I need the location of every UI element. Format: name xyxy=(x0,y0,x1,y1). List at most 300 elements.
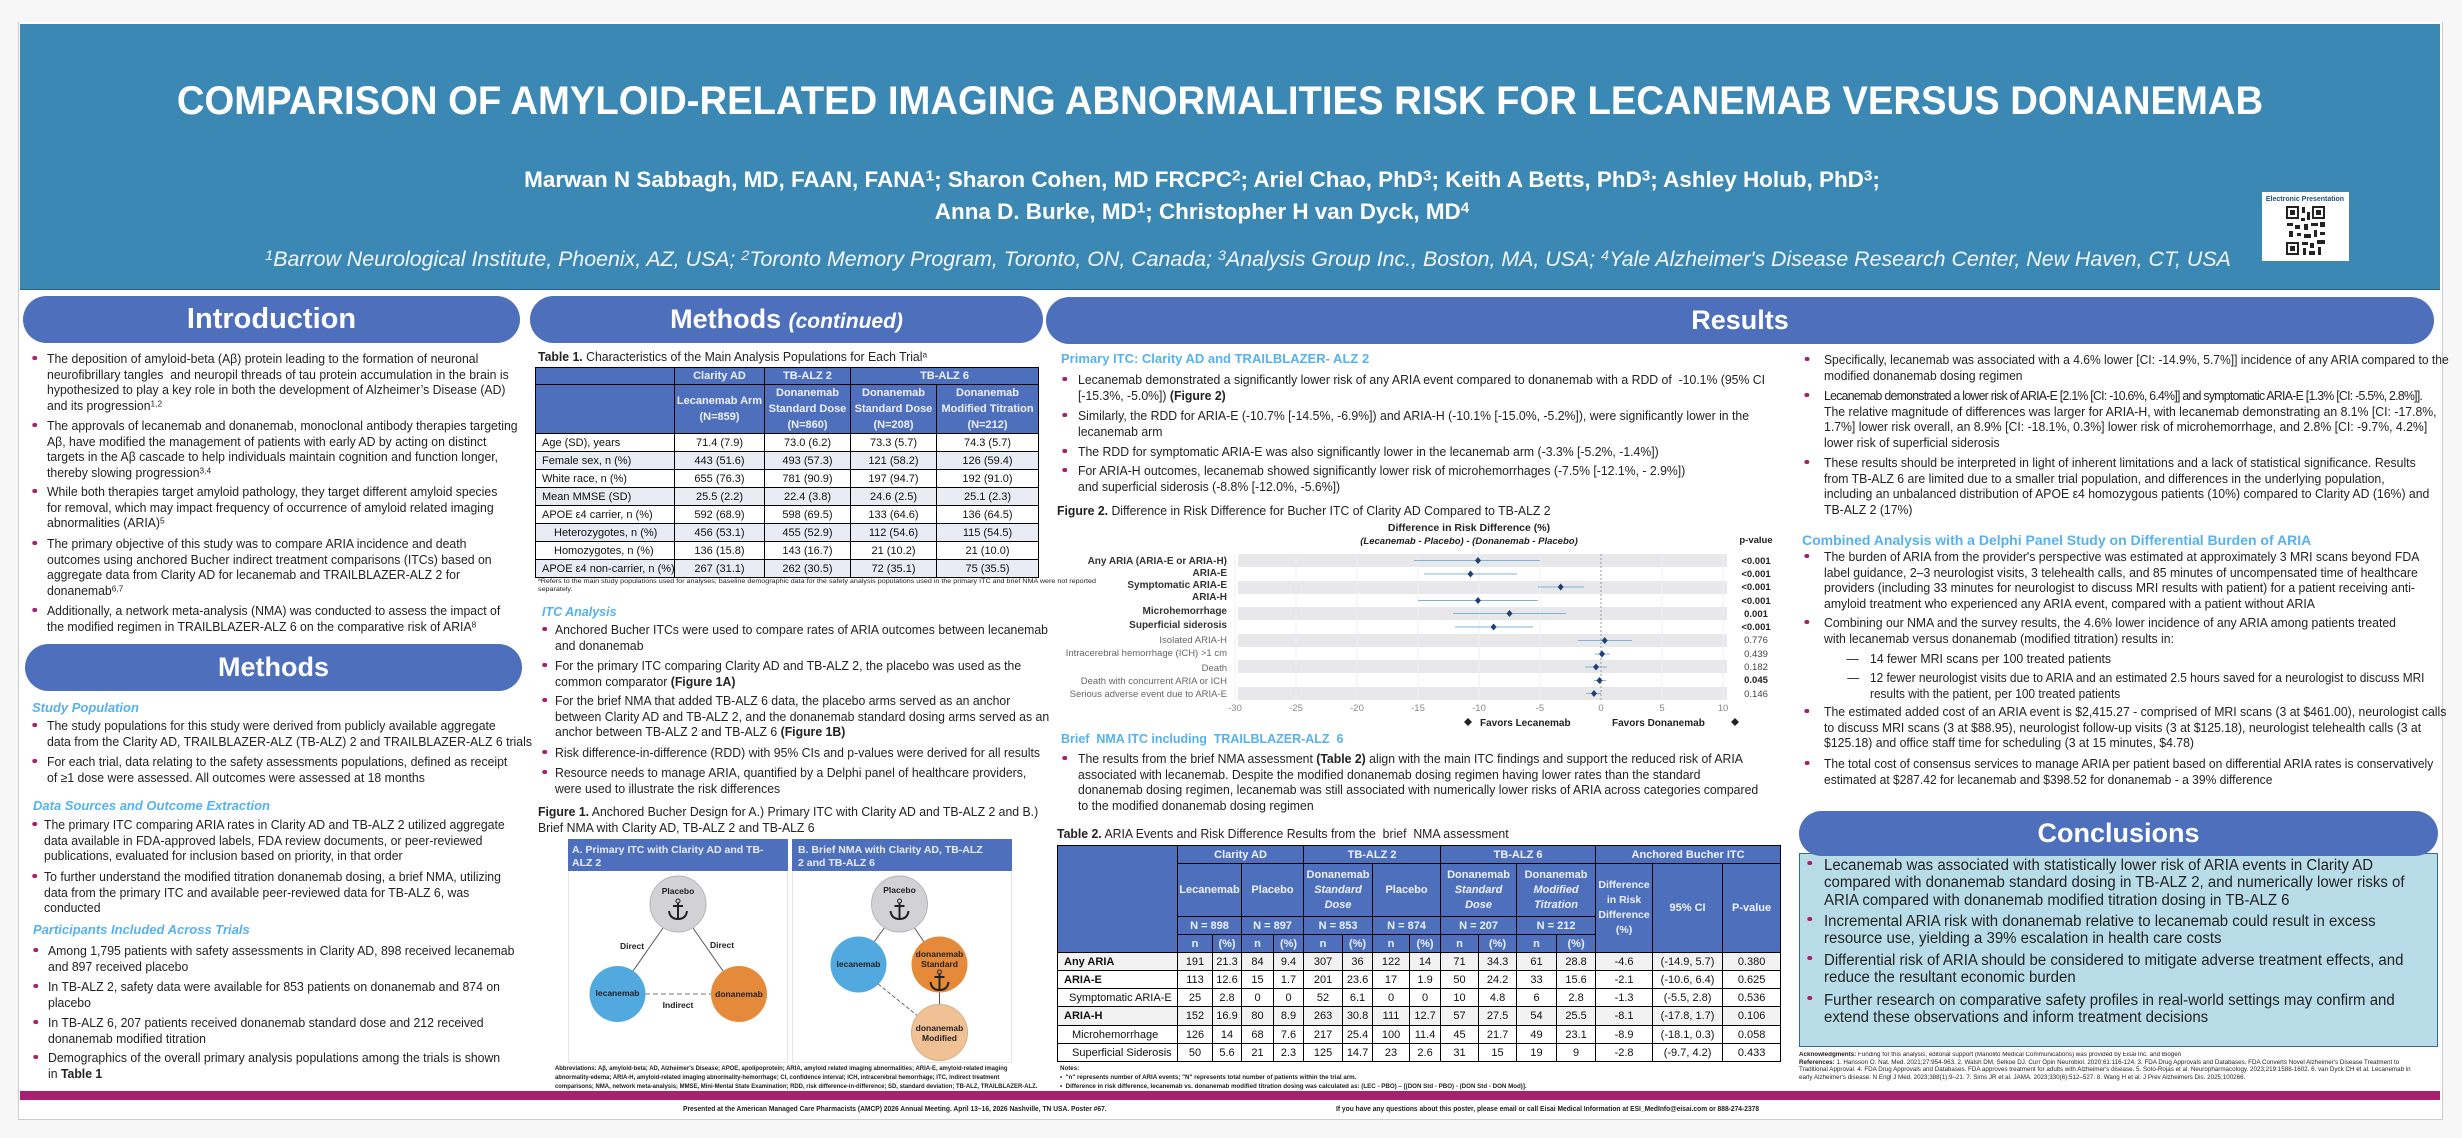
table 2: ARIA events: 17 xyxy=(1385,974,1397,986)
diagram B: brief NMA: 2 and TB-ALZ 6 xyxy=(798,857,875,869)
table 1: characteristics: Female sex, n (%) xyxy=(542,454,631,466)
heading: Results xyxy=(1046,297,2434,344)
table 1: characteristics: APOE ε4 non-carrier, n (%) xyxy=(542,562,674,574)
text: results bullet specific: modified donanemab dosing regimen xyxy=(1824,368,2023,382)
table 2: ARIA events: 25.5 xyxy=(1565,1010,1587,1022)
text: results bullet limitations: TB-ALZ 2 (17%) xyxy=(1824,502,1913,516)
table 2: ARIA events: N = 853 xyxy=(1319,920,1357,932)
table 2: ARIA events: 27.5 xyxy=(1487,1010,1508,1022)
table 1: characteristics: 21 (10.0) xyxy=(965,544,1010,556)
text: intro bullet 5: the modified regimen in TRAILBLAZER-ALZ 6 on the comparative risk of ARIA8 xyxy=(47,619,476,634)
text: intro bullet 3: for removal, which may impact frequency of occurrence of amyloid related imaging xyxy=(47,500,494,514)
text: primary ITC bullet 4 xyxy=(1078,464,1685,495)
table 2: ARIA events: n xyxy=(1456,938,1463,950)
subheading: data sources: Data Sources and Outcome Extraction xyxy=(33,798,270,813)
table 2: ARIA events: 23.6 xyxy=(1347,974,1368,986)
text: results bullet subtypes: lower risk of superficial siderosis xyxy=(1824,436,2000,450)
text: data sources bullet 1: publications, evaluated for inclusion based on priority, in that order xyxy=(44,849,403,863)
table 2: ARIA events: 0.625 xyxy=(1738,974,1765,986)
text: participants bullet 2: In TB-ALZ 2, safety data were available for 853 patients on donanemab and 874 on xyxy=(48,980,500,994)
diagram A: primary ITC: Direct xyxy=(620,941,644,951)
table 2: ARIA events: 34.3 xyxy=(1487,956,1508,968)
table 2: ARIA events: 50 xyxy=(1453,974,1466,986)
diagram B: brief NMA: Placebo xyxy=(883,885,916,895)
table 2: ARIA events: 57 xyxy=(1453,1010,1466,1022)
text: participants bullet 4: in Table 1 xyxy=(48,1066,102,1080)
chart titles: (Lecanemab - Placebo) - (Donanemab - Placebo) xyxy=(1360,536,1578,547)
table 1: characteristics: (N=859) xyxy=(699,411,740,423)
table 2: ARIA events: 2.3 xyxy=(1281,1046,1296,1058)
row labels: Microhemorrhage xyxy=(1143,606,1227,617)
table 2: ARIA events: 71 xyxy=(1453,956,1466,968)
table 1: characteristics: (N=212) xyxy=(967,419,1008,431)
table 2: ARIA events: n xyxy=(1533,938,1540,950)
text: data sources bullet 2: To further understand the modified titration donanemab dosing, a brief NMA, utilizing xyxy=(44,870,501,884)
icon: QR code electronic presentation: Electronic Presentation xyxy=(2266,196,2344,203)
table 2: ARIA events: Donanemab xyxy=(1525,868,1588,880)
table 2: ARIA events: Titration xyxy=(1534,898,1578,910)
table 2: ARIA events: Difference xyxy=(1598,879,1650,891)
table 2: ARIA events: (-9.7, 4.2) xyxy=(1664,1046,1711,1058)
panel: methods xyxy=(25,644,532,1080)
text: conclusion 4: extend these observations and inform treatment decisions xyxy=(1824,1009,2208,1026)
x axis ticks: 5 xyxy=(1659,703,1665,714)
table 2: ARIA events: ARIA-H xyxy=(1064,1010,1102,1022)
table 1 footnote: separately. xyxy=(538,586,572,592)
footer text: meeting: Presented at the American Managed Care Pharmacists (AMCP) 2026 Annual Meeting. April 13–16, 2026 Nashville, TN USA. Poster #67. xyxy=(683,1104,1107,1113)
table 2: ARIA events: N = 874 xyxy=(1387,920,1426,932)
table 2: ARIA events: 21.3 xyxy=(1216,956,1238,968)
table 2: ARIA events: 25.4 xyxy=(1347,1028,1368,1040)
text: population bullet 2: of ≥1 dose were assessed. All outcomes were assessed at 18 months xyxy=(47,770,425,784)
text: ITC bullet 3: anchor between TB-ALZ 2 and TB-ALZ 6 (Figure 1B) xyxy=(555,725,845,739)
plot bands and grid xyxy=(1238,554,1727,700)
table 2: ARIA events: (%) xyxy=(1616,924,1632,936)
table 1: characteristics: 136 (64.5) xyxy=(962,508,1013,520)
table 1 footnote xyxy=(538,577,1096,592)
diagram A: primary ITC xyxy=(568,839,788,1062)
table 1: characteristics: 133 (64.6) xyxy=(868,508,919,520)
footer bar xyxy=(20,1091,2440,1100)
text: sub-bullet neurologist visits: results with the patient, per 100 treated patients xyxy=(1870,686,2120,700)
table title: Table 1: Table 1. Characteristics of the Main Analysis Populations for Each Triala xyxy=(538,349,927,364)
table 2: ARIA events: 9.4 xyxy=(1281,956,1296,968)
text: intro bullet 2: The approvals of lecanemab and donanemab, monoclonal antibody therapies targeting xyxy=(47,419,518,433)
text: participants bullet 4: Demographics of the overall primary analysis populations among the trials is shown xyxy=(48,1051,500,1065)
table 1: characteristics: 21 (10.2) xyxy=(871,544,916,556)
diagram B: brief NMA: donanemab xyxy=(916,1023,963,1033)
favors labels: Favors Lecanemab xyxy=(1480,718,1571,729)
panel: introduction xyxy=(23,296,520,634)
text: sub-bullet MRI scans: 14 fewer MRI scans per 100 treated patients xyxy=(1870,652,2111,666)
text: ITC bullet 4: Risk difference-in-difference (RDD) with 95% CIs and p-values were derived for all results xyxy=(555,746,1040,760)
heading: Methods (continued): Methods (continued) xyxy=(670,304,903,334)
text: intro bullet 4 xyxy=(47,537,492,599)
table 2: ARIA events: 19 xyxy=(1530,1046,1543,1058)
row labels: ARIA-H xyxy=(1192,592,1227,603)
abbreviations xyxy=(555,1065,1037,1090)
table 2: ARIA events: 191 xyxy=(1186,956,1204,968)
table 2: ARIA events: Dose xyxy=(1325,898,1351,910)
table 2: ARIA events: (%) xyxy=(1416,938,1434,950)
table 1: characteristics: TB-ALZ 2 xyxy=(783,370,832,382)
x axis ticks: -10 xyxy=(1472,703,1486,714)
table 1: characteristics: 197 (94.7) xyxy=(868,472,919,484)
text: cost bullet: to discuss MRI scans (3 at $88.95), neurologist follow-up visits (3 at $125.18), neurologist telehealth calls (3 at xyxy=(1824,720,2421,734)
table 2: ARIA events: Placebo xyxy=(1385,884,1428,896)
table 2: ARIA events: Modified xyxy=(1533,884,1579,896)
abbreviations: Abbreviations: Aβ, amyloid-beta; AD, Alzheimer's Disease; APOE, apolipoprotein; ARIA, amyloid related imaging abnormalities; ARIA-E, amyloid-related imaging xyxy=(555,1065,1008,1072)
table 2 notes: • Difference in risk difference, lecanemab vs. donanemab modified titration dosing was calculated as: (LEC - PBO) – [(DON Std - PBO) - (DON Std - DON Mod)]. xyxy=(1060,1083,1527,1090)
diagram A: primary ITC: Placebo xyxy=(662,886,694,896)
chart: forest plot: 0.182 xyxy=(1744,662,1768,673)
text: sub-bullet neurologist visits xyxy=(1870,671,2424,702)
table 2: ARIA events: TB-ALZ 6 xyxy=(1494,848,1542,860)
heading: Methods (continued) xyxy=(530,296,1043,343)
text: conclusion 3: reduce the resultant economic burden xyxy=(1824,969,2076,986)
table 2: ARIA events: 68 xyxy=(1251,1028,1264,1040)
table 2: ARIA events: Clarity AD xyxy=(1214,848,1267,860)
table 2: ARIA events: 31 xyxy=(1453,1046,1466,1058)
text: conclusion 3: Differential risk of ARIA should be considered to mitigate adverse treatment effects, and xyxy=(1824,952,2403,969)
favors labels: Favors Donanemab xyxy=(1612,718,1705,729)
text: total cost bullet: The total cost of consensus services to manage ARIA per patient based on differential ARIA rates is conservatively xyxy=(1824,757,2433,771)
table 2: ARIA events: Donanemab xyxy=(1307,868,1370,880)
heading: Methods: Methods xyxy=(218,652,329,682)
table 2: ARIA events: (-5.5, 2.8) xyxy=(1664,992,1711,1004)
text: primary ITC bullet 2: lecanemab arm xyxy=(1078,424,1162,438)
header banner xyxy=(20,24,2440,290)
table 2: ARIA events: 0.106 xyxy=(1738,1010,1765,1022)
table 1: characteristics: (N=860) xyxy=(787,419,828,431)
text: intro bullet 1 xyxy=(47,352,509,414)
text: intro bullet 2: thereby slowing progression3,4 xyxy=(47,465,211,480)
table 1: characteristics: 73.3 (5.7) xyxy=(870,436,917,448)
table 2: ARIA events: 1.9 xyxy=(1417,974,1433,986)
chart: forest plot: Isolated ARIA-H xyxy=(1159,635,1227,646)
text: population bullet 1 xyxy=(47,719,532,750)
chart: forest plot: Death with concurrent ARIA or ICH xyxy=(1081,676,1227,687)
table 2: ARIA events: 307 xyxy=(1314,956,1332,968)
text: participants bullet 1: and 897 received placebo xyxy=(48,960,188,974)
confidence intervals and point estimates xyxy=(1414,560,1632,694)
text: participants bullet 2: placebo xyxy=(48,996,91,1010)
table 2: ARIA events: (-18.1, 0.3) xyxy=(1661,1028,1714,1040)
text: data sources bullet 1 xyxy=(44,818,505,864)
table 2: ARIA events: 33 xyxy=(1530,974,1543,986)
chart: forest plot: 0.146 xyxy=(1744,689,1768,700)
table 2: ARIA events: 95% CI xyxy=(1670,902,1706,914)
title: COMPARISON OF AMYLOID-RELATED IMAGING ABNORMALITIES RISK FOR LECANEMAB VERSUS DONANEMAB xyxy=(177,79,2263,123)
text: intro bullet 1: and its progression1,2 xyxy=(47,398,162,412)
table 2: ARIA events: n xyxy=(1192,938,1198,950)
table 1: characteristics: 112 (54.6) xyxy=(869,526,918,538)
table 2: ARIA events: Dose xyxy=(1465,898,1492,910)
panel: methods continued xyxy=(530,296,1096,1090)
subheading: ITC analysis: ITC Analysis xyxy=(542,605,617,619)
table 2: ARIA events: 14 xyxy=(1221,1028,1233,1040)
table 2: ARIA events: 5.6 xyxy=(1219,1046,1235,1058)
chart: forest plot xyxy=(1066,522,1773,729)
text: intro bullet 4: outcomes using anchored Bucher indirect treatment comparisons (ITCs) based on xyxy=(47,552,492,566)
table 2: ARIA events: 23 xyxy=(1385,1046,1397,1058)
acknowledgments and references: Traditional Approval. 4. FDA Drug Approvals and Databases. FDA approves treatment for adults with Alzheimer's disease. 5. Soto-Rojas et al. Neuropharmacology. 2023;219:1588-1602. 6. van Dyck CH et al. Lecanemab in xyxy=(1799,1067,2411,1073)
text: conclusion 3 xyxy=(1824,952,2403,987)
x axis ticks: 10 xyxy=(1718,703,1728,714)
table 2: ARIA events: N = 207 xyxy=(1459,920,1498,932)
table 2: ARIA events xyxy=(1057,845,1781,1062)
table 2: ARIA events: -8.1 xyxy=(1615,1010,1634,1022)
x axis ticks: 0 xyxy=(1598,703,1604,714)
table 1: characteristics: 262 (30.5) xyxy=(782,562,833,574)
text: intro bullet 2: targets in the Aβ cascade to help individuals maintain cognition and function longer, xyxy=(47,450,498,464)
table 2: ARIA events: 52 xyxy=(1317,992,1329,1004)
text: population bullet 2: For each trial, data relating to the safety assessments populations, defined as receipt xyxy=(47,755,507,769)
text: intro bullet 1: hypothesized to play a key role in both the development of Alzheimer’s Disease (AD) xyxy=(47,383,506,397)
text: combining bullet: with lecanemab versus donanemab (modified titration) results in: xyxy=(1824,632,2174,646)
text: participants bullet 3: donanemab modified titration xyxy=(48,1032,206,1046)
text: data sources bullet 2: data from the primary ITC and available peer-reviewed data for TB-ALZ 6, was xyxy=(44,886,469,900)
table 2: ARIA events: (%) xyxy=(1489,938,1506,950)
acknowledgments and references: References: 1. Hansson O. Nat. Med. 2021;27:954-963. 2. Walsh DM, Selkoe DJ. Curr Opin Neurobiol. 2020;61:116-124. 3. FDA Drug Approvals and Databases. FDA Converts Novel Alzheimer's Disease Treatment to xyxy=(1799,1060,2399,1066)
chart: forest plot: 0.439 xyxy=(1744,649,1768,660)
table 2: ARIA events: 8.9 xyxy=(1281,1010,1296,1022)
text: results bullet limitations xyxy=(1824,456,2429,518)
text: primary ITC bullet 3: The RDD for symptomatic ARIA-E was also significantly lower in the lecanemab arm (-3.3% [-5.2%, -1.4%]) xyxy=(1078,445,1659,459)
heading: Conclusions: Conclusions xyxy=(2037,818,2200,848)
table 2: ARIA events: 16.9 xyxy=(1216,1010,1238,1022)
abbreviations: comparisons; NMA, network meta-analysis; MMSE, Mini-Mental State Examination; RDD, risk difference-in-difference; SD, standard deviation; TB-ALZ, TRAILBLAZER-ALZ. xyxy=(555,1083,1037,1090)
table 1: characteristics: Age (SD), years xyxy=(542,436,620,448)
table 1: characteristics: 25.5 (2.2) xyxy=(696,490,743,502)
table 1: characteristics: 493 (57.3) xyxy=(782,454,833,466)
text: sub-bullet neurologist visits: 12 fewer neurologist visits due to ARIA and an estimated 2.5 hours saved for a neurologist to discuss MRI xyxy=(1870,671,2424,685)
text: results bullet limitations: including an unbalanced distribution of APOE ε4 homozygous patients (10%) compared to Clarity AD (16%) and xyxy=(1824,487,2429,501)
text: participants bullet 3: In TB-ALZ 6, 207 patients received donanemab standard dose and 212 received xyxy=(48,1016,484,1030)
table 1: characteristics: Donanemab xyxy=(862,387,925,399)
table 2: ARIA events: TB-ALZ 2 xyxy=(1348,848,1396,860)
table 2: ARIA events: 4.8 xyxy=(1490,992,1505,1004)
table 2: ARIA events: 152 xyxy=(1186,1010,1204,1022)
text: cost bullet: The estimated added cost of an ARIA event is $2,415.27 - comprised of MRI scans (3 at $461.00), neurologist calls xyxy=(1824,705,2446,719)
subheading: participants: Participants Included Across Trials xyxy=(33,922,250,937)
text: intro bullet 1: neurofibrillary tangles and neuropil threads of tau protein accumulation in the brain is xyxy=(47,368,509,382)
text: conclusion 1: ARIA compared with donanemab modified titration dosing in TB-ALZ 6 xyxy=(1824,892,2290,909)
table 1: characteristics: 455 (52.9) xyxy=(782,526,833,538)
table 2: ARIA events: 36 xyxy=(1351,956,1364,968)
heading: Methods xyxy=(25,644,522,691)
table 2: ARIA events: Difference xyxy=(1598,909,1650,921)
table 2: ARIA events: 11.4 xyxy=(1415,1028,1435,1040)
table 2: ARIA events: 6 xyxy=(1533,992,1540,1004)
table 2: ARIA events: 2.6 xyxy=(1417,1046,1433,1058)
table 2: ARIA events: 111 xyxy=(1383,1010,1399,1022)
text: ITC bullet 1: and donanemab xyxy=(555,638,644,652)
text: intro bullet 2: Aβ, have modified the management of patients with early AD by acting on distinct xyxy=(47,434,486,448)
diagram B: brief NMA: B. Brief NMA with Clarity AD, TB-ALZ xyxy=(798,844,983,856)
text: combining bullet: Combining our NMA and the survey results, the 4.6% lower incidence of any ARIA among patients treated xyxy=(1824,616,2396,630)
table 2 notes: Notes: xyxy=(1060,1065,1079,1072)
table 2: ARIA events: 23.1 xyxy=(1565,1028,1587,1040)
x axis ticks: -20 xyxy=(1350,703,1364,714)
table 2: ARIA events: n xyxy=(1388,938,1394,950)
row labels: ARIA-E xyxy=(1193,568,1227,579)
table 2: ARIA events: 21 xyxy=(1251,1046,1264,1058)
text: population bullet 2 xyxy=(47,755,507,786)
text: primary ITC bullet 1 xyxy=(1078,373,1765,404)
table 1: characteristics: 598 (69.5) xyxy=(782,508,833,520)
text: intro bullet 3 xyxy=(47,485,497,532)
chart: forest plot: Intracerebral hemorrhage (ICH) >1 cm xyxy=(1066,648,1227,659)
text: brief NMA bullet: donanemab dosing regimen, lecanemab was still associated with numerically lower risks of ARIA across categories compared xyxy=(1078,783,1758,797)
table 1: characteristics: 25.1 (2.3) xyxy=(964,490,1011,502)
text: conclusion 2: Incremental ARIA risk with donanemab relative to lecanemab could result in excess xyxy=(1824,913,2376,930)
text: ITC bullet 3 xyxy=(555,694,1049,740)
table 1: characteristics: Standard Dose xyxy=(769,403,846,415)
table 1: characteristics: 71.4 (7.9) xyxy=(696,436,743,448)
table 2: ARIA events: (-14.9, 5.7) xyxy=(1661,956,1714,968)
text: conclusion 4 xyxy=(1824,992,2395,1027)
text: total cost bullet xyxy=(1824,757,2433,788)
table 2: ARIA events: 122 xyxy=(1382,956,1400,968)
text: population bullet 1: data from the Clarity AD, TRAILBLAZER-ALZ (TB-ALZ) 2 and TRAILBLAZER-ALZ 6 trials xyxy=(47,734,532,748)
table 1: characteristics: 655 (76.3) xyxy=(694,472,745,484)
p-values: <0.001 xyxy=(1741,622,1771,633)
table 1: characteristics: 74.3 (5.7) xyxy=(964,436,1011,448)
table 1: characteristics: 781 (90.9) xyxy=(782,472,833,484)
table 1: characteristics: Standard Dose xyxy=(855,403,932,415)
text: primary ITC bullet 4: For ARIA-H outcomes, lecanemab showed significantly lower risk of microhemorrhages (-7.5% [-12.1%, - 2.9%]) xyxy=(1078,464,1685,478)
table 2: ARIA events: 50 xyxy=(1189,1046,1201,1058)
favors labels xyxy=(1464,718,1739,729)
table 1: characteristics: 121 (58.2) xyxy=(868,454,919,466)
table 2: ARIA events: 25 xyxy=(1189,992,1201,1004)
table 2: ARIA events: 15 xyxy=(1251,974,1264,986)
table 2: ARIA events: (%) xyxy=(1568,938,1585,950)
table 2: ARIA events: 0.058 xyxy=(1738,1028,1765,1040)
text: population bullet 1: The study populations for this study were derived from publicly available aggregate xyxy=(47,719,496,733)
row labels: Superficial siderosis xyxy=(1129,620,1227,631)
panel: conclusions xyxy=(1799,811,2438,1047)
text: burden bullet: providers (including 33 minutes for neurologist to discuss MRI results with patient) for a patient receiving anti- xyxy=(1824,581,2415,595)
text: intro bullet 4: The primary objective of this study was to compare ARIA incidence and death xyxy=(47,537,466,551)
text: participants bullet 3 xyxy=(48,1016,484,1047)
table 1: characteristics: 592 (68.9) xyxy=(694,508,745,520)
text: burden bullet: amyloid treatment who experienced any ARIA event, compared with a patient without ARIA xyxy=(1824,596,2315,610)
table 2: ARIA events: 49 xyxy=(1530,1028,1543,1040)
table 2: ARIA events: Lecanemab xyxy=(1179,884,1240,896)
table 1: characteristics: APOE ε4 carrier, n (%) xyxy=(542,508,653,520)
table 2: ARIA events: 14.7 xyxy=(1347,1046,1368,1058)
heading: Introduction xyxy=(23,296,520,343)
table 2: ARIA events: 2.8 xyxy=(1219,992,1235,1004)
text: ITC bullet 5: were used to illustrate the risk differences xyxy=(555,782,780,796)
table 1: characteristics: 143 (16.7) xyxy=(782,544,833,556)
text: results bullet subtypes xyxy=(1824,389,2437,451)
table 2: ARIA events: 10 xyxy=(1453,992,1466,1004)
table 2: ARIA events: 15 xyxy=(1491,1046,1504,1058)
subheading: primary ITC: Primary ITC: Clarity AD and TRAILBLAZER- ALZ 2 xyxy=(1061,351,1369,366)
text: burden bullet xyxy=(1824,550,2419,612)
text: results bullet specific xyxy=(1824,353,2449,384)
table 2: ARIA events: (%) xyxy=(1218,938,1236,950)
table 2: ARIA events: 0 xyxy=(1254,992,1261,1004)
table 2: ARIA events: 12.6 xyxy=(1216,974,1238,986)
table 2: ARIA events: -2.1 xyxy=(1615,974,1634,986)
table 1 footnote: aRefers to the main study populations used for analyses; baseline demographic data for the safety analysis populations used in the primary ITC and brief NMA were not reported xyxy=(538,577,1096,585)
text: results bullet limitations: These results should be interpreted in light of inherent limitations and a lack of statistical significance. Results xyxy=(1824,456,2416,470)
table 1: characteristics: Homozygotes, n (%) xyxy=(554,544,654,556)
table 2: ARIA events: N = 212 xyxy=(1537,920,1575,932)
table 2: ARIA events: 0.433 xyxy=(1738,1046,1765,1058)
table 2: ARIA events: -2.8 xyxy=(1615,1046,1634,1058)
table 2: ARIA events: 24.2 xyxy=(1487,974,1508,986)
x axis ticks xyxy=(1228,703,1728,714)
table 2: ARIA events: 7.6 xyxy=(1281,1028,1296,1040)
table 1: characteristics: 115 (54.5) xyxy=(963,526,1012,538)
table 2: ARIA events: 0.380 xyxy=(1738,956,1765,968)
table 2: ARIA events: 12.7 xyxy=(1414,1010,1436,1022)
text: combining bullet xyxy=(1824,616,2396,647)
table 1: characteristics xyxy=(535,367,1039,578)
text: cost bullet: $125.18) and office staff time for scheduling (3 at 15 minutes, $4.78) xyxy=(1824,736,2194,750)
table 2: ARIA events: 100 xyxy=(1382,1028,1400,1040)
table 2: ARIA events: (%) xyxy=(1349,938,1366,950)
figure title: Figure 1: Brief NMA with Clarity AD, TB-ALZ 2 and TB-ALZ 6 xyxy=(538,820,815,834)
diagram A: primary ITC: A. Primary ITC with Clarity AD and TB- xyxy=(572,844,764,856)
table 2: ARIA events: ARIA-E xyxy=(1064,974,1102,986)
text: ITC bullet 1 xyxy=(555,623,1048,654)
text: ITC bullet 3: between Clarity AD and TB-ALZ 2, and the donanemab standard dosing arms served as an xyxy=(555,710,1049,724)
chart titles: Difference in Risk Difference (%) xyxy=(1388,522,1550,534)
table 2: ARIA events: 0 xyxy=(1422,992,1428,1004)
table 2: ARIA events: Standard xyxy=(1314,884,1362,896)
table 1: characteristics: 136 (15.8) xyxy=(694,544,745,556)
subheading: brief NMA: Brief NMA ITC including TRAILBLAZER-ALZ 6 xyxy=(1061,731,1343,746)
table 2: ARIA events: 113 xyxy=(1186,974,1204,986)
table 2: ARIA events: (%) xyxy=(1280,938,1297,950)
acknowledgments and references xyxy=(1799,1052,2411,1080)
table 2: ARIA events: Symptomatic ARIA-E xyxy=(1069,992,1172,1004)
text: brief NMA bullet: to the modified donanemab dosing regimen xyxy=(1078,798,1314,812)
table 2: ARIA events: 217 xyxy=(1314,1028,1332,1040)
text: data sources bullet 1: data available in FDA-approved labels, FDA review documents, or peer-reviewed xyxy=(44,834,483,848)
table 2 notes: • "n" represents number of ARIA events; "N" represents total number of patients within the trial arm. xyxy=(1060,1074,1356,1081)
figure title: Figure 1: Figure 1. Anchored Bucher Design for A.) Primary ITC with Clarity AD and TB-ALZ 2 and B.) xyxy=(538,805,1038,819)
figure title: Figure 1 xyxy=(538,805,1038,834)
diagram B: brief NMA: Standard xyxy=(921,959,958,969)
text: conclusion 2: resource use, yielding a 39% escalation in health care costs xyxy=(1824,930,2221,947)
table 2: ARIA events: 126 xyxy=(1186,1028,1204,1040)
panel: results left column xyxy=(1057,351,1781,1090)
table 2: ARIA events: Donanemab xyxy=(1447,868,1510,880)
p-values: 0.001 xyxy=(1744,609,1769,620)
table 2: ARIA events: 45 xyxy=(1453,1028,1466,1040)
table 2: ARIA events: 9 xyxy=(1573,1046,1579,1058)
table 2: ARIA events: 84 xyxy=(1251,956,1264,968)
text: participants bullet 4 xyxy=(48,1051,500,1082)
figure 1: network diagrams xyxy=(568,839,1012,1063)
table 2: ARIA events: Microhemorrhage xyxy=(1072,1028,1158,1040)
table 2: ARIA events: 54 xyxy=(1530,1010,1543,1022)
text: burden bullet: label guidance, 2–3 neurologist visits, 3 telehealth calls, and 85 minutes of uncompensated time of healthcare xyxy=(1824,566,2418,580)
text: participants bullet 2 xyxy=(48,980,500,1011)
diagram B: brief NMA: donanemab xyxy=(916,949,963,959)
text: data sources bullet 2: conducted xyxy=(44,901,101,915)
text: primary ITC bullet 1: [-15.3%, -5.0%]) (Figure 2) xyxy=(1078,388,1226,402)
text: intro bullet 2 xyxy=(47,419,518,481)
text: ITC bullet 2: For the primary ITC comparing Clarity AD and TB-ALZ 2, the placebo was used as the xyxy=(555,659,1021,673)
